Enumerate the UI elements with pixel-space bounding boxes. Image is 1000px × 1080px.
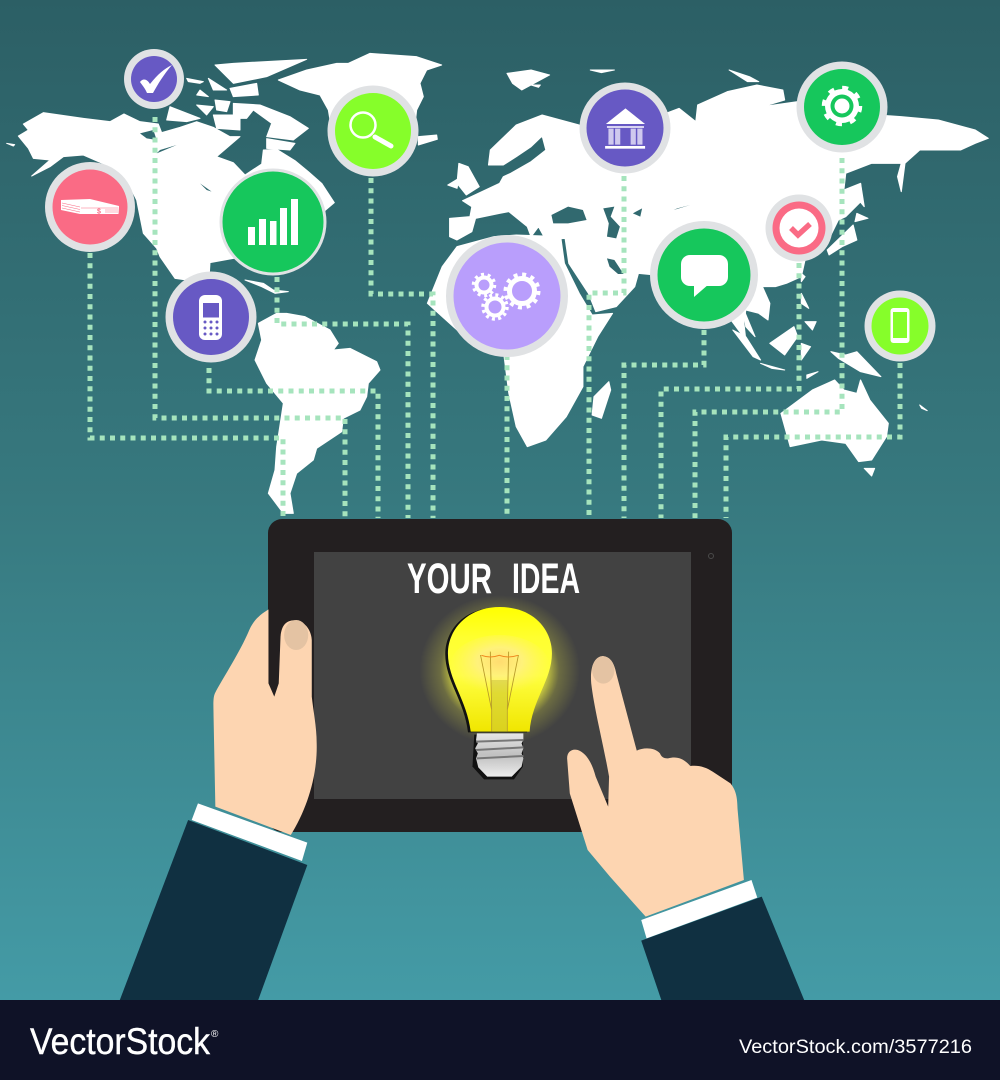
- world map: [7, 53, 988, 513]
- right sleeve: [641, 897, 804, 1000]
- left arm and hand: [120, 609, 317, 1000]
- icon: magnifier badge: [328, 86, 418, 176]
- map: the Americas and Greenland: [7, 53, 442, 513]
- registered mark: ®: [211, 1029, 219, 1040]
- icon: speech bubble badge: [650, 221, 758, 329]
- icon: check badge: [124, 49, 184, 109]
- right hand: [567, 656, 744, 917]
- icon: bar chart badge: [220, 168, 326, 276]
- icon: mobile phone badge: [166, 272, 256, 362]
- title: YOUR IDEA: YOUR: [407, 555, 492, 603]
- icon: pink tick badge: [766, 194, 832, 262]
- icon: gears badge: [446, 235, 568, 357]
- icon: bank badge: [580, 82, 670, 174]
- right cuff: [641, 880, 757, 938]
- icon: money badge: [45, 162, 135, 252]
- title: YOUR IDEA: IDEA: [512, 555, 580, 603]
- right fingernail: [592, 656, 614, 684]
- icon: light bulb: [419, 595, 580, 779]
- icon: money badge: $: [97, 208, 101, 216]
- dotted connector lines: [90, 117, 900, 518]
- watermark logo text: VectorStock: [30, 1021, 210, 1062]
- left sleeve: [120, 820, 307, 1000]
- tablet: [268, 519, 732, 832]
- left cuff: [192, 803, 307, 861]
- watermark bar: [0, 1000, 1000, 1080]
- left thumbnail: [284, 620, 308, 650]
- map: Eurasia, Africa and Oceania: [427, 70, 988, 476]
- tablet screen: [314, 552, 691, 799]
- icon: smartphone badge: [864, 290, 936, 362]
- icon: settings gear badge: [796, 62, 888, 152]
- right arm and hand: [567, 656, 804, 1000]
- left hand: [213, 609, 317, 835]
- watermark url: VectorStock.com/3577216: [739, 1037, 972, 1058]
